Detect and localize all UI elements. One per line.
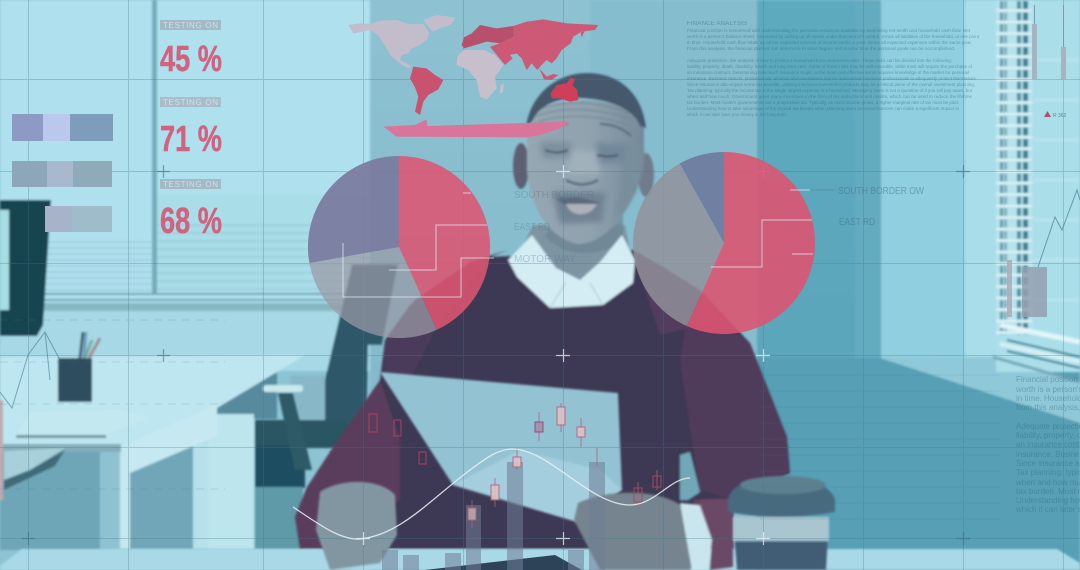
window sill (880, 357, 1080, 423)
second paragraph (687, 58, 977, 118)
cup lid (728, 476, 835, 517)
right sleeve (680, 300, 790, 500)
office chair (217, 264, 398, 549)
North America (348, 20, 429, 68)
right edge candle chart (1007, 5, 1080, 317)
bars (1022, 267, 1047, 317)
label: south border: SOUTH BORDER OW (838, 186, 924, 197)
monitor (0, 200, 51, 336)
grey slice (633, 164, 724, 326)
ears (513, 143, 529, 189)
grey slice (309, 247, 437, 338)
first paragraph (687, 28, 980, 52)
label tag: TESTING ON (163, 180, 218, 189)
second paragraph: an insurance contract. Determining how much insurance to get, at the most cost effective terms requires knowledge of the market for personal (687, 70, 969, 76)
Indonesia (539, 68, 558, 80)
second paragraph: insurance. Business owners, professionals, athletes and entertainers require specialized insurance professionals to adequately protect themselves. (687, 76, 977, 82)
Asia (490, 19, 598, 70)
paragraph block lower right (1015, 375, 1080, 514)
South America (410, 67, 443, 115)
second paragraph: Adequate protection: the analysis of how to protect a household from unforeseen risks. These risks can be divided into the following: (687, 58, 952, 64)
label tag: TESTING ON (163, 21, 218, 30)
Europe (462, 25, 514, 48)
left window wall (0, 0, 372, 320)
gap between arm and body (680, 452, 700, 500)
white cuff (680, 503, 712, 570)
pie label leader line (810, 189, 834, 191)
stat: 45 percent (160, 20, 222, 79)
label: motor: MOTOR WAY (514, 254, 576, 265)
right reveal (881, 0, 1001, 360)
purple slice (680, 152, 724, 243)
bar 1 (12, 114, 113, 141)
red slice (399, 156, 490, 330)
first paragraph: Financial position is concerned with understanding the personal resources available by examining net worth and household cash flow. Net (687, 28, 971, 34)
sleeve cuff right (693, 498, 733, 549)
Australia (551, 77, 578, 102)
drawer unit (208, 414, 254, 549)
candlestick chart (369, 403, 661, 528)
forehead creases (536, 103, 632, 126)
stat: 68 percent (160, 179, 222, 241)
pencil cup (58, 358, 92, 402)
nose (566, 180, 598, 184)
first paragraph: worth is a person's balance sheet, calculated by adding up all assets under that person's control, minus all liabilities of the household, at one point (687, 34, 980, 40)
second paragraph: which it can later save you money in the long term. (687, 112, 787, 118)
triangle marker (1044, 111, 1051, 117)
window frame bar (152, 0, 157, 295)
shirt collar (508, 235, 635, 308)
label tag: TESTING ON (163, 98, 218, 107)
bar 2 (12, 161, 112, 187)
desk leg (120, 445, 130, 549)
Madagascar (500, 84, 504, 93)
bar 3 (45, 206, 112, 232)
brows (600, 124, 631, 136)
face shadows (540, 142, 642, 224)
red slice (687, 152, 815, 334)
value text: R 362 (1053, 113, 1067, 119)
second paragraph (1015, 422, 1080, 514)
mouth (556, 197, 600, 205)
second paragraph: tax burden. Most modern governments use a progressive tax. Typically, as one's income grows, a higher marginal rate of tax must be paid. (687, 100, 959, 106)
left sleeve (295, 380, 400, 549)
window blind slats (993, 325, 1080, 382)
value: 45 % (160, 38, 222, 79)
hair (526, 73, 646, 128)
second paragraph: Understanding how to take advantage of the myriad tax breaks when planning one's personal finances can make a significant impact in (687, 106, 959, 112)
label: east left: EAST RD (514, 222, 550, 233)
cross markers (22, 165, 770, 545)
left edge line chart (0, 332, 60, 408)
sleeve end (700, 500, 733, 570)
right window (996, 0, 1080, 372)
collar placket (550, 282, 603, 308)
pie connector lines (343, 190, 813, 297)
world map (348, 15, 598, 137)
dark cross markers (22, 165, 970, 545)
first paragraph: From this analysis, the financial planner can determine to what degree and in what time the personal goals can be accomplished. (687, 46, 955, 52)
hollow red candles (369, 414, 661, 502)
left edge strip (0, 400, 3, 500)
second paragraph: liability, property, death, disability, health and long term care. Some of these risks may be self-insurable, while most will require the purchase of (687, 64, 973, 70)
column bars (382, 462, 605, 570)
neck (515, 225, 632, 290)
value: 68 % (160, 200, 222, 241)
pie chart left (308, 156, 490, 338)
cup body (733, 517, 829, 570)
bottom desk surface (0, 549, 1080, 570)
left hand (316, 482, 397, 570)
closed eyes (545, 150, 618, 156)
coffee cup (728, 476, 835, 570)
candle wicks (472, 403, 657, 528)
second paragraph: Tax planning: typically the income tax is the single largest expense in a household. Managing taxes is not a question of if you will pay taxes, but (687, 88, 973, 94)
second paragraph: when and how much. Government gives many incentives in the form of tax deductions and credits, which can be used to reduce the lifetime (687, 94, 972, 100)
label: south left: SOUTH BORDER (514, 190, 594, 201)
face (527, 100, 644, 244)
right lower wall (757, 358, 1080, 570)
hands and cuff (316, 482, 733, 570)
pie chart right (633, 152, 815, 334)
purple slice (308, 156, 399, 263)
under-desk shadow (0, 450, 120, 550)
block heading: FINANCE ANALYSIS (687, 21, 747, 27)
wave line (293, 449, 690, 539)
man reading document (295, 73, 790, 549)
label: east rd: EAST RD (839, 217, 875, 228)
first paragraph (1015, 375, 1080, 412)
Antarctica (383, 119, 570, 137)
tablet on desk (425, 555, 582, 570)
Africa (457, 50, 503, 99)
document sheet (380, 372, 622, 522)
trend line (1038, 190, 1080, 267)
stat: 71 percent (160, 97, 222, 159)
value: 71 % (160, 118, 222, 159)
right hand (574, 493, 695, 570)
second paragraph: Since insurance also enjoys some tax benefits, utilizing insurance investment products may be a critical piece of the overall investment planning. (687, 82, 975, 88)
Japan (581, 31, 585, 37)
sweater torso (295, 250, 790, 549)
candle bodies (468, 407, 585, 520)
middle wall (370, 0, 757, 570)
paragraph block top right (687, 21, 980, 118)
laptop (4, 448, 65, 480)
segmented bars (12, 114, 113, 232)
pie labels (514, 186, 924, 265)
first paragraph: in time. Household cash flow totals up all the expected sources of income within a year, minus all expected expenses within the same year. (687, 40, 972, 46)
desk top (0, 355, 305, 447)
Greenland (423, 15, 455, 32)
right wall column (757, 0, 882, 570)
tablet (16, 410, 148, 435)
